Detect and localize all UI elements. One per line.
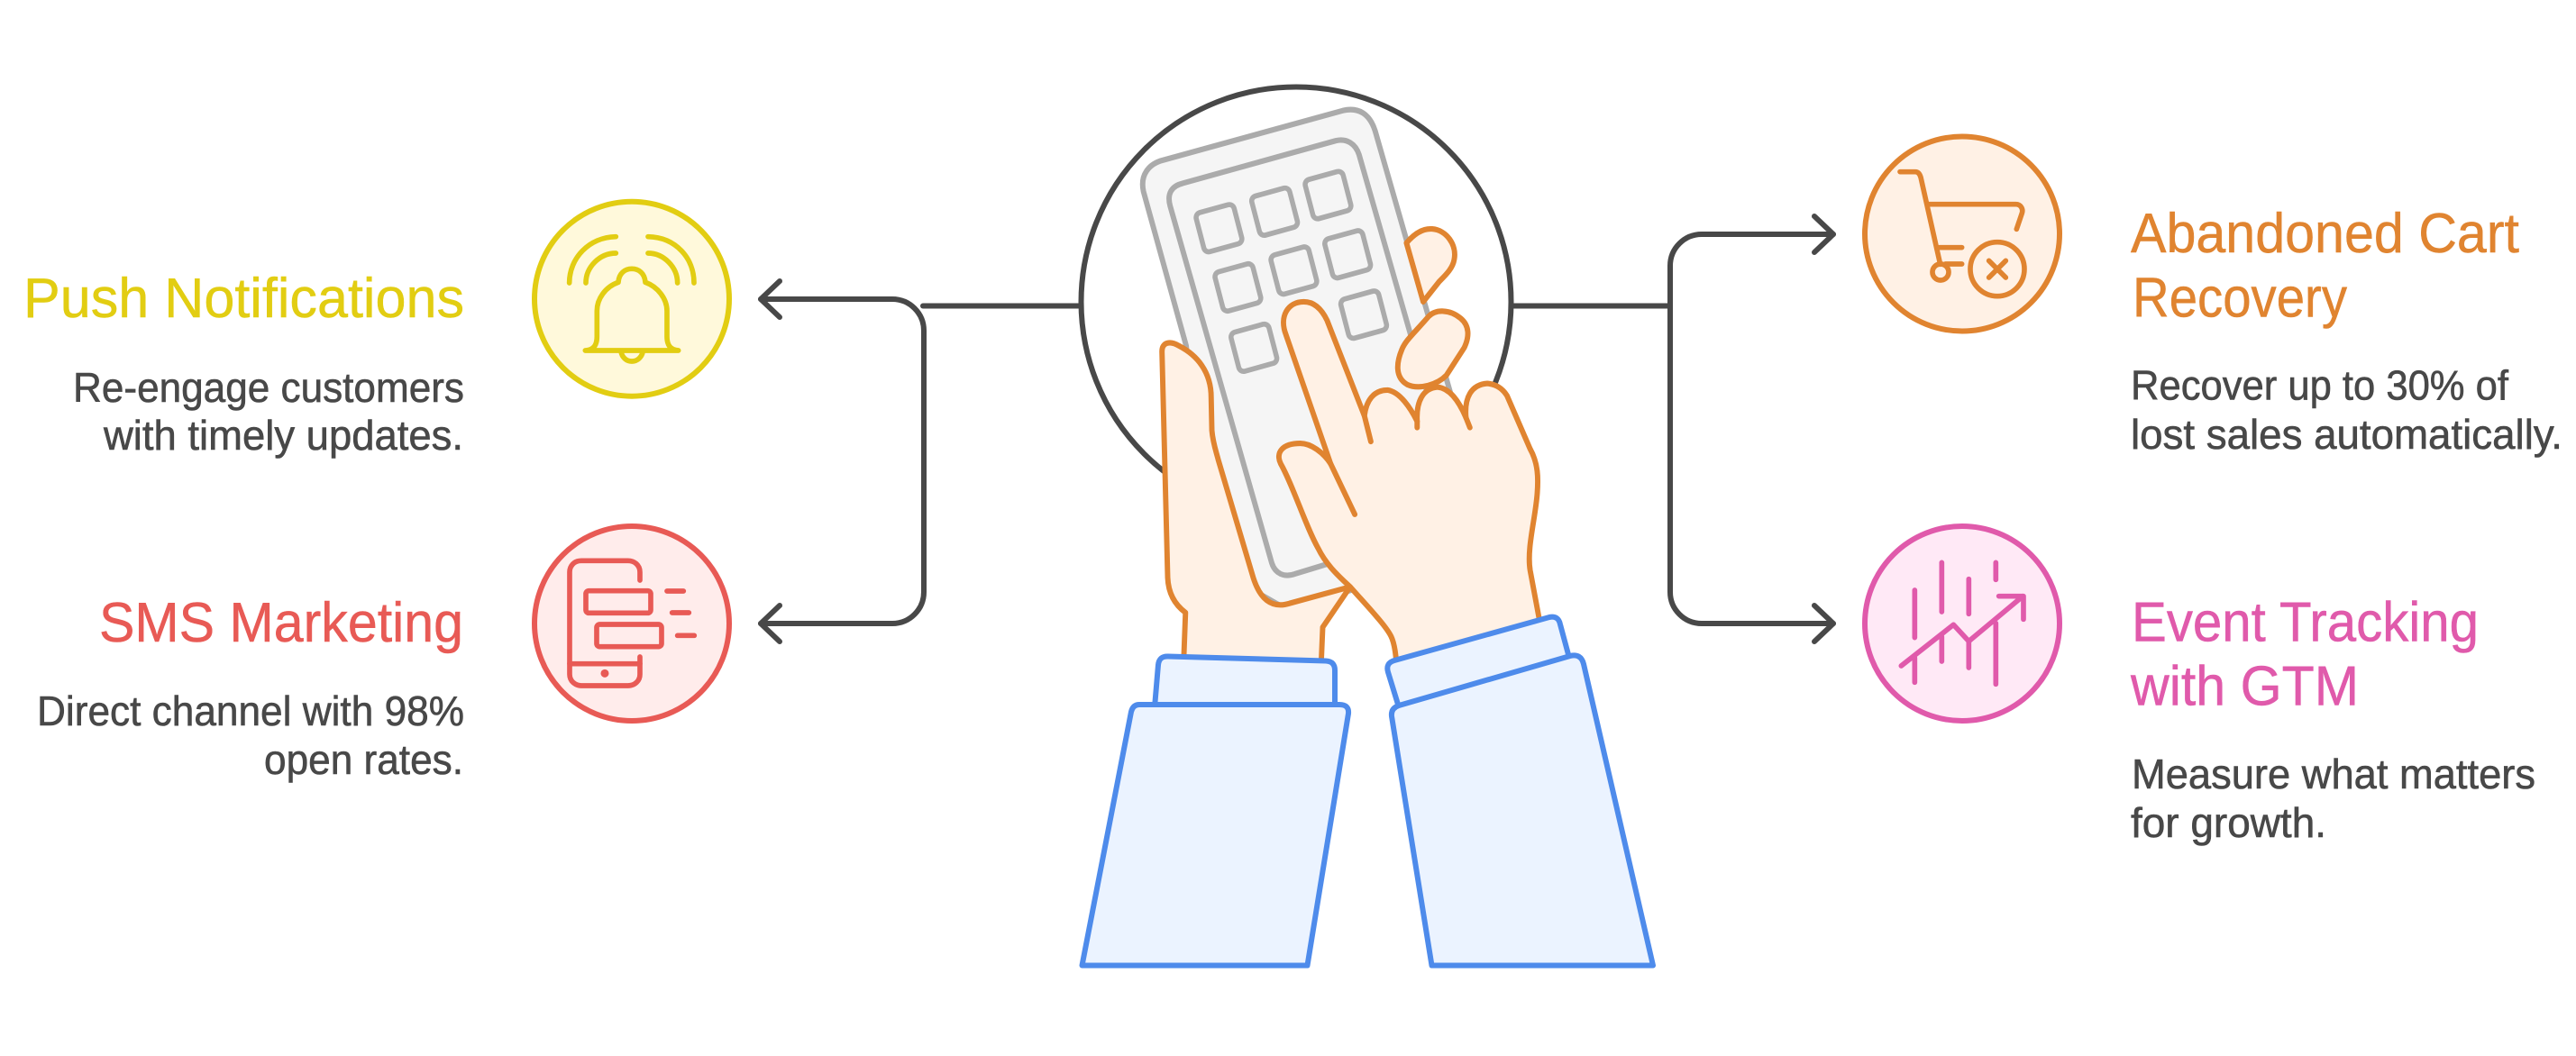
right sleeve (1387, 617, 1653, 966)
connector: right branch arrows (1512, 216, 1833, 642)
circle behind phone (1082, 86, 1511, 517)
connector: left branch arrows (761, 281, 1081, 642)
heading: abandoned cart recovery (2131, 203, 2519, 330)
phone body (1143, 110, 1452, 609)
description: sms marketing: open rates. (264, 736, 463, 783)
panel: event tracking with gtm (1865, 526, 2535, 846)
hands and phone (1143, 110, 1571, 669)
panel: push notifications (23, 202, 729, 459)
phone screen (1169, 140, 1429, 576)
left hand (1162, 342, 1350, 669)
finger creases (1330, 415, 1470, 514)
heading: event tracking with gtm: with GTM (2130, 656, 2359, 717)
description: event tracking with gtm: for growth. (2131, 799, 2326, 846)
heading: event tracking with gtm (2130, 591, 2479, 717)
description: push notifications: Re-engage customers (73, 364, 464, 411)
description: abandoned cart recovery (2131, 362, 2562, 458)
description: push notifications: with timely updates. (103, 412, 463, 459)
description: event tracking with gtm (2131, 751, 2535, 846)
finger behind phone (1406, 229, 1455, 302)
description: sms marketing (37, 687, 464, 783)
heading: abandoned cart recovery: Recovery (2133, 267, 2347, 330)
description: event tracking with gtm: Measure what matters (2132, 751, 2535, 797)
left sleeve (1082, 656, 1348, 966)
icon: rising chart (1865, 526, 2060, 721)
icon: phone messages (534, 526, 729, 721)
central illustration: hands holding phone (1082, 86, 1653, 966)
heading: sms marketing: SMS Marketing (99, 592, 463, 654)
panel: sms marketing (37, 526, 729, 783)
heading: abandoned cart recovery: Abandoned Cart (2131, 203, 2519, 265)
description: push notifications (73, 364, 464, 459)
description: sms marketing: Direct channel with 98% (37, 687, 464, 734)
icon: cart with cross (1865, 137, 2060, 332)
right hand (1279, 302, 1571, 669)
description: abandoned cart recovery: lost sales automatically. (2131, 411, 2562, 458)
heading: event tracking with gtm: Event Tracking (2132, 591, 2479, 654)
front finger (1398, 311, 1468, 387)
icon: bell (534, 202, 729, 396)
phone keys (1195, 170, 1388, 372)
description: abandoned cart recovery: Recover up to 30% of (2131, 362, 2508, 409)
heading: push notifications: Push Notifications (23, 268, 464, 330)
panel: abandoned cart recovery (1865, 137, 2562, 458)
